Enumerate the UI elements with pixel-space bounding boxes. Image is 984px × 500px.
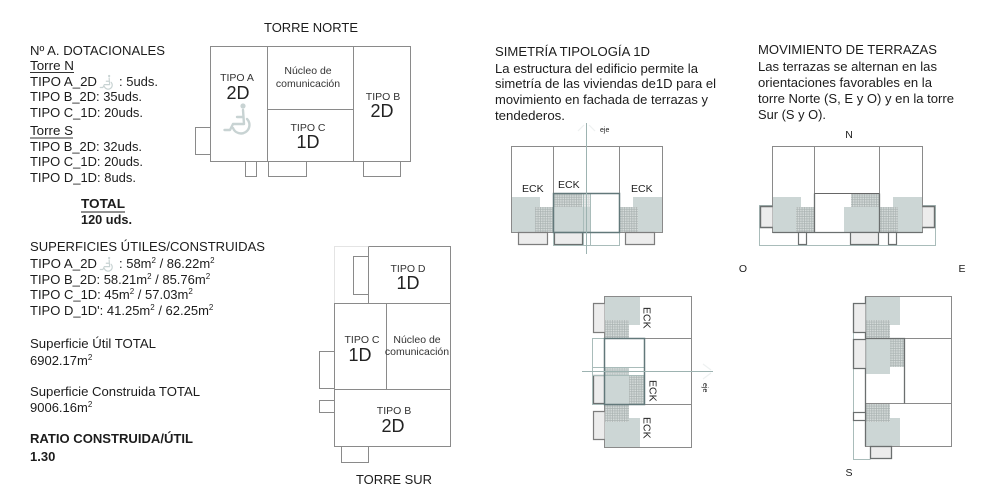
text block: numero de dotacionales: Nº A. DOTACIONALES bbox=[30, 43, 165, 58]
text block: superficies utiles y construidas: 2 bbox=[152, 256, 157, 265]
text block: superficies utiles y construidas: : 58m bbox=[119, 256, 152, 271]
text block: superficies utiles y construidas: 2 bbox=[209, 303, 214, 312]
ratio construida/util bbox=[30, 431, 193, 464]
plan: torre norte: 2D bbox=[226, 83, 250, 103]
text block: superficies utiles y construidas bbox=[30, 239, 265, 415]
text block: numero de dotacionales: Torre N bbox=[30, 58, 74, 73]
text block: numero de dotacionales: TIPO B_2D: 32uds. bbox=[30, 139, 142, 154]
plan: torre norte: comunicación bbox=[276, 78, 340, 90]
text block: movimiento de terrazas: Sur (S y O). bbox=[758, 107, 826, 122]
text block: simetria tipologia 1D: La estructura del edificio permite la bbox=[495, 61, 699, 76]
text block: superficies utiles y construidas: 2 bbox=[147, 272, 152, 281]
text block: superficies utiles y construidas: TIPO B_2D: 58.21m bbox=[30, 272, 147, 287]
text block: superficies utiles y construidas: 6902.17m bbox=[30, 353, 88, 368]
text block: simetria tipologia 1D: SIMETRÍA TIPOLOGÍA 1D bbox=[495, 44, 650, 59]
text block: numero de dotacionales: TIPO B_2D: 35uds. bbox=[30, 89, 142, 104]
text block: numero de dotacionales: TIPO D_1D: 8uds. bbox=[30, 170, 136, 185]
text block: superficies utiles y construidas: TIPO A_2D bbox=[30, 256, 97, 271]
text block: superficies utiles y construidas: Superficie Construida TOTAL bbox=[30, 384, 200, 399]
diagram: simetria torre norte: ECK bbox=[522, 183, 544, 195]
diagram: movimiento terrazas torre norte bbox=[739, 129, 966, 275]
text block: simetria tipologia 1D bbox=[495, 44, 716, 123]
diagram: movimiento terrazas torre sur: S bbox=[845, 467, 853, 479]
plan: torre sur: comunicación bbox=[385, 346, 449, 358]
text block: superficies utiles y construidas: 9006.16m bbox=[30, 400, 88, 415]
text block: simetria tipologia 1D: tendederos. bbox=[495, 108, 565, 123]
diagram: simetria torre sur: ECK bbox=[640, 417, 652, 439]
plan: torre sur: TIPO B bbox=[377, 405, 411, 417]
text block: numero de dotacionales: TIPO C_1D: 20uds. bbox=[30, 105, 143, 120]
text block: movimiento de terrazas: torre Norte (S, E y O) y en la torre bbox=[758, 91, 954, 106]
text block: superficies utiles y construidas: 2 bbox=[130, 287, 135, 296]
ratio construida/util: 1.30 bbox=[30, 449, 55, 464]
text block: simetria tipologia 1D: movimiento en fachada de terrazas y bbox=[495, 92, 708, 107]
text block: superficies utiles y construidas: 2 bbox=[88, 353, 93, 362]
text block: superficies utiles y construidas: 2 bbox=[206, 272, 211, 281]
plan: torre sur: Núcleo de bbox=[393, 334, 441, 346]
icon: small wheelchair bbox=[100, 75, 112, 89]
text block: numero de dotacionales bbox=[30, 43, 165, 185]
diagram: movimiento terrazas torre norte: O bbox=[739, 263, 747, 275]
diagram: simetria torre norte: ECK bbox=[631, 183, 653, 195]
plan: torre sur: 2D bbox=[381, 416, 405, 436]
plan: torre norte: 1D bbox=[296, 132, 320, 152]
text block: movimiento de terrazas: Las terrazas se alternan en las bbox=[758, 59, 937, 74]
text block: superficies utiles y construidas: / 62.25m bbox=[155, 303, 209, 318]
diagram: movimiento terrazas torre sur bbox=[845, 296, 952, 479]
plan: torre sur: TIPO D bbox=[390, 263, 426, 275]
diagram: movimiento terrazas torre norte: E bbox=[958, 263, 966, 275]
text block: numero de dotacionales: Torre S bbox=[30, 123, 73, 138]
axis: eje vertical bbox=[578, 123, 609, 254]
total de unidades bbox=[81, 196, 132, 227]
plan: torre norte: TIPO C bbox=[290, 122, 326, 134]
text block: numero de dotacionales: TIPO A_2D bbox=[30, 74, 97, 89]
axis: eje horizontal bbox=[582, 364, 713, 392]
diagram: simetria torre sur: ECK bbox=[646, 380, 658, 402]
text block: superficies utiles y construidas: / 86.22m bbox=[156, 256, 210, 271]
heading: torre sur: TORRE SUR bbox=[356, 472, 432, 487]
plan: torre sur: TIPO C bbox=[344, 334, 380, 346]
diagram: simetria torre norte bbox=[511, 123, 662, 254]
text block: superficies utiles y construidas: TIPO C_1D: 45m bbox=[30, 287, 130, 302]
plan: torre sur: 1D bbox=[348, 345, 372, 365]
axis: eje horizontal: eje bbox=[701, 383, 708, 392]
text block: superficies utiles y construidas: / 85.76m bbox=[152, 272, 206, 287]
text block: numero de dotacionales: TIPO C_1D: 20uds. bbox=[30, 154, 143, 169]
plan: torre norte: Núcleo de bbox=[284, 65, 332, 77]
plan: torre sur: 1D bbox=[396, 273, 420, 293]
text block: superficies utiles y construidas: SUPERFICIES ÚTILES/CONSTRUIDAS bbox=[30, 239, 265, 254]
text block: numero de dotacionales: : 5uds. bbox=[119, 74, 158, 89]
text block: superficies utiles y construidas: 2 bbox=[150, 303, 155, 312]
total de unidades: TOTAL bbox=[81, 196, 125, 211]
plan: torre norte: 2D bbox=[370, 101, 394, 121]
plan: torre norte: TIPO A bbox=[220, 72, 254, 84]
ratio construida/util: RATIO CONSTRUIDA/ÚTIL bbox=[30, 431, 193, 446]
text block: simetria tipologia 1D: simetría de las viviendas de1D para el bbox=[495, 76, 716, 91]
plan: torre sur bbox=[320, 246, 450, 487]
text block: superficies utiles y construidas: 2 bbox=[188, 287, 193, 296]
icon: wheelchair bbox=[224, 103, 249, 133]
text block: superficies utiles y construidas: 2 bbox=[88, 400, 93, 409]
plan: torre norte bbox=[196, 20, 410, 176]
text block: superficies utiles y construidas: 2 bbox=[210, 256, 215, 265]
diagram: simetria torre sur: ECK bbox=[640, 307, 652, 329]
text block: movimiento de terrazas: MOVIMIENTO DE TERRAZAS bbox=[758, 42, 937, 57]
heading: torre norte: TORRE NORTE bbox=[264, 20, 358, 35]
diagram: simetria torre sur bbox=[582, 296, 713, 448]
text block: superficies utiles y construidas: TIPO D_1D': 41.25m bbox=[30, 303, 150, 318]
text block: movimiento de terrazas bbox=[758, 42, 954, 122]
diagram: simetria torre norte: ECK bbox=[558, 179, 580, 191]
text block: superficies utiles y construidas: Superficie Útil TOTAL bbox=[30, 336, 156, 351]
plan: torre norte: TIPO B bbox=[366, 91, 400, 103]
text block: movimiento de terrazas: orientaciones favorables en la bbox=[758, 75, 933, 90]
axis: eje vertical: eje bbox=[600, 127, 609, 134]
icon: small wheelchair in surfaces list bbox=[100, 257, 112, 271]
total de unidades: 120 uds. bbox=[81, 212, 132, 227]
diagram: movimiento terrazas torre norte: N bbox=[845, 129, 853, 141]
text block: superficies utiles y construidas: / 57.03m bbox=[134, 287, 188, 302]
